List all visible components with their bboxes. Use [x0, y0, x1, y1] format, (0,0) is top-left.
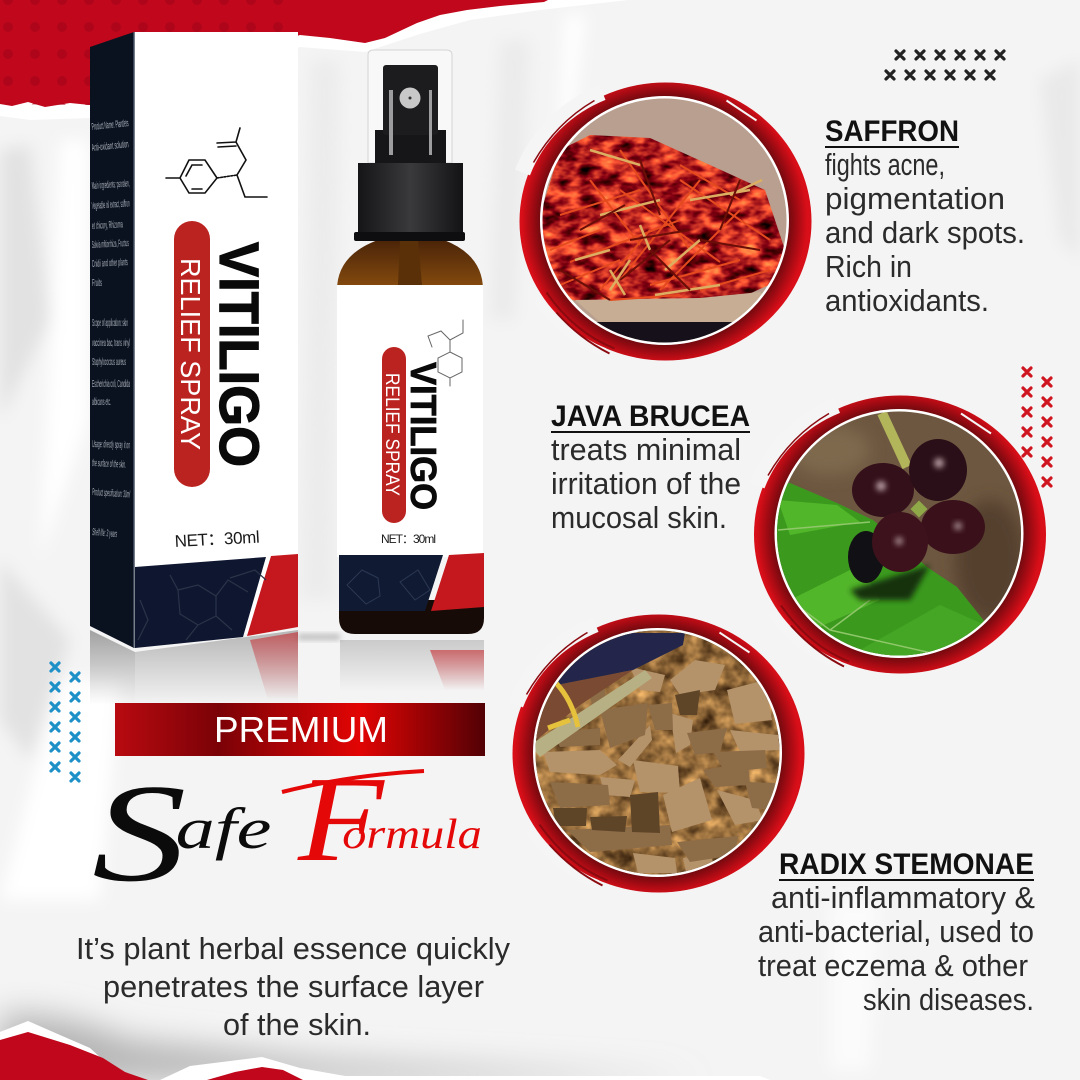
box side small print: albicans etc. — [92, 397, 111, 408]
java brucea text: treats minimal — [551, 432, 741, 467]
box reflection — [90, 630, 298, 705]
box side small print: Fruits — [92, 278, 102, 289]
radix stemonae text: RADIX STEMONAE — [779, 848, 1034, 881]
premium banner: PREMIUM — [214, 709, 388, 750]
torn red paper top-left — [0, 0, 628, 120]
radix stemonae text: treat eczema & other — [758, 948, 1028, 983]
box red pill — [174, 221, 210, 487]
java brucea text: mucosal skin. — [551, 500, 727, 535]
product box: Usage: directly spray it on — [92, 439, 130, 451]
bottle label — [337, 285, 483, 557]
script heading: Safe Formula: ormula — [342, 811, 482, 857]
saffron text — [825, 115, 1025, 318]
product box: et chicory, Rhizoma — [92, 219, 123, 232]
saffron text: Rich in — [825, 249, 912, 284]
script heading: Safe Formula — [92, 752, 482, 910]
bottle red pill — [382, 347, 406, 523]
ground shadow — [298, 634, 340, 640]
description text: penetrates the surface layer — [103, 969, 484, 1004]
bottle title: VITILIGO — [403, 362, 444, 510]
product box: vaccinea bac, trans vinyl — [92, 338, 130, 349]
product box: Staphylococcus aureus — [92, 357, 126, 368]
bottle clear cap — [368, 50, 452, 163]
radix stemonae text: skin diseases. — [863, 982, 1034, 1017]
box side small print — [91, 118, 130, 540]
radix stemonae text — [758, 848, 1035, 1017]
bottle collar — [358, 163, 463, 233]
box side panel — [90, 32, 134, 648]
product box: Vegetable oil extract, saffron — [91, 198, 130, 212]
product box: the surface of the skin. — [92, 458, 126, 471]
box band molecule pattern — [138, 570, 266, 640]
box front panel — [134, 32, 298, 648]
script heading: Safe Formula: S — [92, 755, 186, 910]
product box: Anti-oxidant solution — [91, 139, 129, 154]
bottle reflection — [340, 640, 484, 692]
java brucea ring and photo — [754, 396, 1046, 674]
product box — [90, 32, 298, 705]
box subtitle: RELIEF SPRAY — [175, 258, 206, 450]
product box: Salvia miltiorrhiza, Fructus — [92, 238, 129, 251]
radix stemonae text: anti-bacterial, used to — [758, 914, 1034, 949]
bottle navy band — [339, 555, 443, 611]
product box: Cnidii and other plants — [92, 257, 128, 270]
product bottle — [337, 50, 484, 692]
description text — [76, 931, 510, 1042]
radix stemonae text: anti-inflammatory & — [771, 880, 1035, 915]
java brucea text: JAVA BRUCEA — [551, 400, 750, 433]
bottle base dark glass — [339, 600, 484, 634]
box molecule icon — [166, 128, 267, 197]
script heading: Safe Formula: F — [297, 752, 386, 887]
java brucea text — [551, 400, 750, 535]
java brucea text: irritation of the — [551, 466, 741, 501]
bottle nozzle — [375, 65, 446, 164]
bottle red band — [431, 553, 484, 611]
product box: Product specification: 30ml — [92, 487, 130, 501]
cross marks: blue — [51, 663, 79, 781]
torn red paper bottom-left — [0, 1021, 770, 1080]
box side small print: Shelf life: 3 years — [92, 527, 118, 540]
description text: of the skin. — [223, 1007, 371, 1042]
box red band — [247, 554, 298, 636]
box title: VITILIGO — [208, 242, 271, 467]
radix stemonae ring and photo — [512, 614, 804, 892]
saffron text: antioxidants. — [825, 283, 989, 318]
saffron text: fights acne, — [825, 147, 945, 182]
bottle shoulder amber glass — [337, 240, 483, 300]
product box: Scope of application: skin — [92, 318, 128, 329]
script heading: Safe Formula: afe — [176, 797, 271, 861]
bottle molecule icon — [428, 320, 463, 386]
saffron text: pigmentation — [825, 181, 1005, 216]
premium banner — [115, 703, 485, 756]
description text: It’s plant herbal essence quickly — [76, 931, 510, 966]
saffron text: SAFFRON — [825, 115, 959, 148]
box net volume: NET：30ml — [174, 528, 260, 551]
bottle subtitle: RELIEF SPRAY — [381, 373, 402, 496]
box navy band — [135, 557, 266, 648]
cross marks: dark — [886, 51, 1004, 79]
saffron ring and photo — [520, 82, 812, 360]
saffron text: and dark spots. — [825, 215, 1025, 250]
product box: Product Name: Plantlets — [91, 118, 129, 133]
product box: Escherichia coli, Candida — [92, 379, 130, 390]
cross marks: red — [1023, 368, 1051, 486]
product box: Main ingredients: psoralen, — [91, 178, 130, 192]
bottle net volume: NET：30ml — [381, 532, 436, 546]
